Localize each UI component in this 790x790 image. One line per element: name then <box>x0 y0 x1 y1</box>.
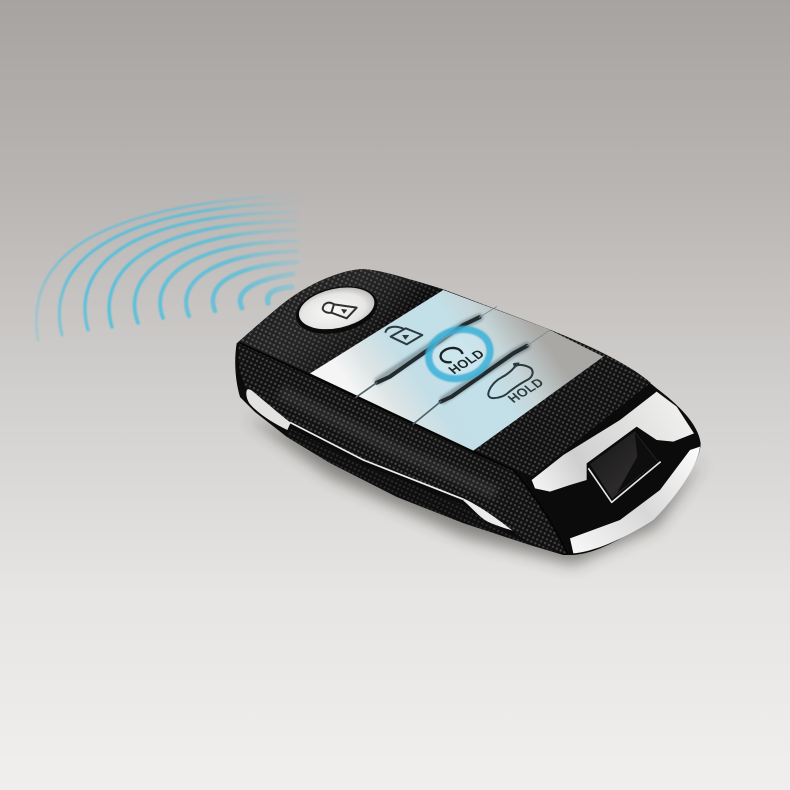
upper chrome <box>532 392 694 492</box>
side chrome strip <box>246 389 513 531</box>
icon: car <box>488 363 533 398</box>
textured top face <box>239 269 651 477</box>
lower textured shell <box>287 428 563 554</box>
cast shadow <box>247 417 703 565</box>
key body <box>235 269 701 555</box>
side highlight <box>280 392 497 493</box>
textured side face <box>238 343 567 554</box>
key slot <box>588 428 661 502</box>
hold button blue ring <box>423 323 495 385</box>
top edge line <box>239 343 567 554</box>
lower chrome <box>570 447 700 553</box>
label: trunk hold: HOLD <box>504 375 547 405</box>
wireless signal arcs <box>36 195 297 340</box>
icon: engine start arrow <box>441 348 463 362</box>
label: engine hold: HOLD <box>445 347 488 377</box>
chrome end cap <box>532 392 700 553</box>
icon: closed lock <box>323 303 357 318</box>
round lock button <box>292 279 382 341</box>
button panel <box>310 290 603 451</box>
smart key fob (drawn in a 3x local grid) <box>235 269 703 565</box>
button gap lines <box>356 307 550 424</box>
icon: open padlock <box>385 327 422 344</box>
